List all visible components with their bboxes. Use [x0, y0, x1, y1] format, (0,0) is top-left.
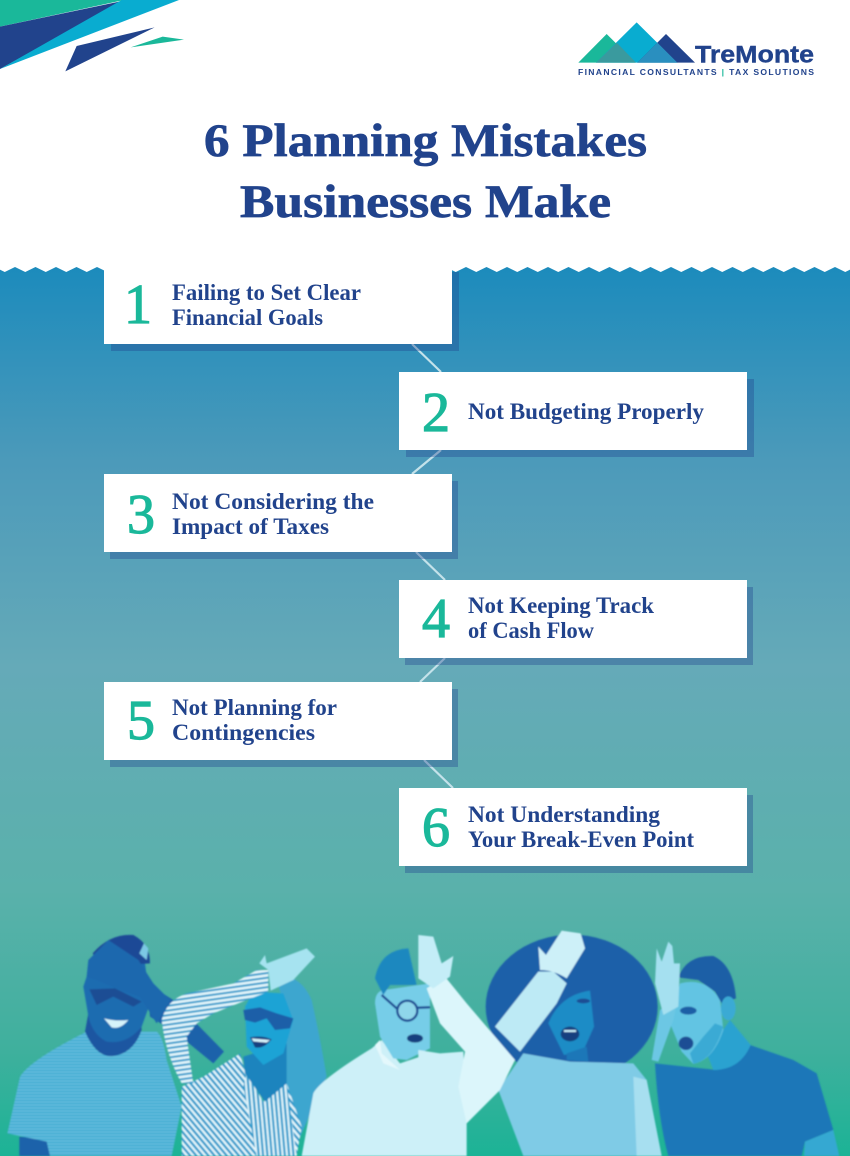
- card 5: 5: [127, 690, 155, 752]
- group of people with hands on foreheads: [7, 931, 839, 1156]
- card 4: 4: [422, 588, 450, 650]
- person 2: woman in striped shirt: [162, 948, 327, 1156]
- card 5: Contingencies: [172, 720, 315, 745]
- gradient background: [0, 267, 850, 1156]
- person 5: man in dark tee: [652, 942, 839, 1156]
- person 3: man in white shirt: [302, 935, 515, 1156]
- card 3: [104, 474, 458, 559]
- card 3: Not Considering the: [172, 489, 374, 514]
- card 1: Failing to Set Clear: [172, 280, 361, 305]
- title: [204, 115, 647, 228]
- title: 6 Planning Mistakes: [204, 115, 647, 167]
- card 1: Financial Goals: [172, 305, 323, 330]
- card 4: Not Keeping Track: [468, 593, 654, 618]
- connector lines: [412, 344, 453, 788]
- card 4: [399, 580, 753, 665]
- card 5: [104, 682, 458, 767]
- logo mountains: [578, 22, 695, 63]
- card 5: Not Planning for: [172, 695, 337, 720]
- person 4: woman with afro: [486, 931, 662, 1156]
- card 6: 6: [422, 797, 450, 859]
- logo: TreMonte: [578, 22, 814, 77]
- person 1: man in striped tee: [7, 935, 224, 1156]
- card 6: [399, 788, 753, 873]
- card 3: 3: [127, 484, 155, 546]
- card 2: [399, 372, 754, 457]
- corner shapes decoration: [0, 0, 184, 71]
- card 2: Not Budgeting Properly: [468, 399, 704, 424]
- title: Businesses Make: [240, 176, 611, 228]
- logo tagline: FINANCIAL CONSULTANTS | TAX SOLUTIONS: [578, 67, 814, 77]
- card 6: Not Understanding: [468, 802, 660, 827]
- card 1: 1: [124, 274, 152, 336]
- logo wordmark: TreMonte: [695, 42, 814, 68]
- card 4: of Cash Flow: [468, 618, 594, 643]
- card 3: Impact of Taxes: [172, 514, 329, 539]
- card 1: [104, 262, 459, 351]
- card 2: 2: [422, 382, 450, 444]
- card 6: Your Break-Even Point: [468, 827, 694, 852]
